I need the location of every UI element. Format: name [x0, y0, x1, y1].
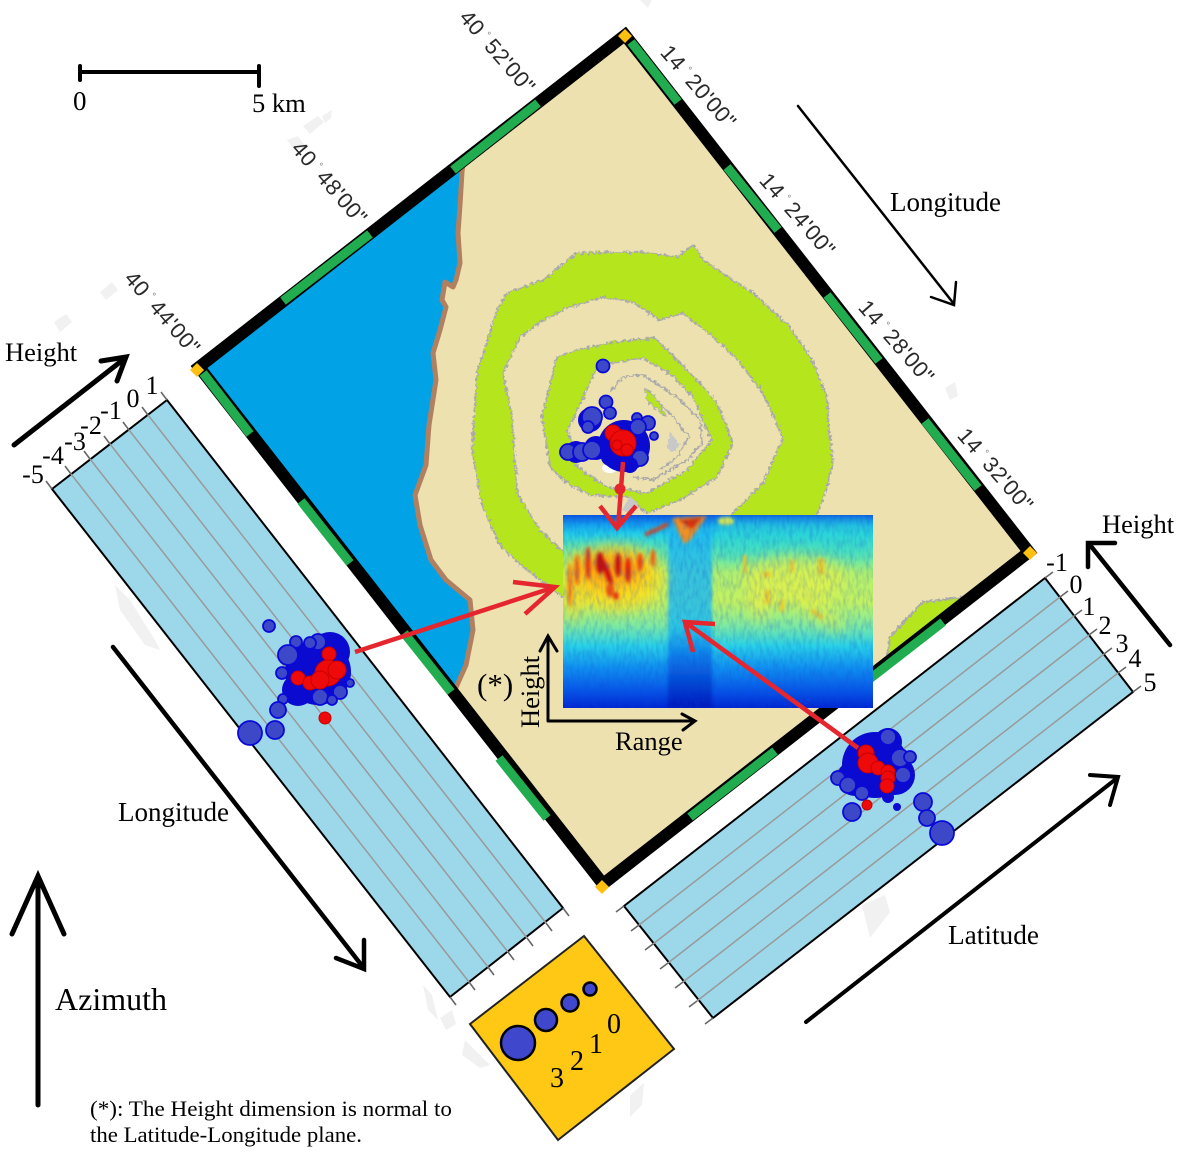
arrow: height direction left [5, 337, 126, 445]
height axis labels: 5 [1144, 668, 1156, 697]
longitude tick labels: 32'00" [978, 452, 1038, 516]
arrow: longitude section to spectrogram [355, 582, 555, 652]
legend circles [501, 982, 596, 1060]
footnote [90, 1096, 452, 1147]
longitude tick labels: 14 [655, 40, 691, 75]
height axis labels: 1 [146, 371, 158, 400]
earthquake cluster in section [831, 728, 954, 845]
arrow: map cluster to spectrogram [600, 462, 636, 528]
inset axes: Range [615, 726, 683, 756]
label: (*) marker: (*) [477, 667, 513, 702]
height axis labels: -5 [22, 460, 44, 489]
longitude tick labels: 14 [853, 295, 889, 330]
scale bar [73, 66, 306, 118]
arrow: longitude direction left: Longitude [118, 797, 229, 827]
longitude tick labels: 14 [952, 423, 988, 458]
arrow: latitude section to spectrogram [685, 622, 858, 748]
left red hot stripes [568, 546, 656, 607]
earthquake cluster in section [238, 620, 354, 745]
arrow: height direction left: Height [5, 337, 78, 367]
panel: longitude-height section [22, 371, 569, 1005]
volcano elevation contours [472, 245, 965, 662]
latitude tick labels: 44'00" [145, 295, 205, 359]
legend labels: 3 [550, 1063, 564, 1094]
arrow: azimuth direction [12, 876, 167, 1105]
outer green ring [472, 245, 833, 620]
longitude tick labels: 24'00" [780, 197, 840, 261]
depth grid lines [71, 415, 546, 982]
height axis labels: 3 [1116, 629, 1128, 658]
speckle streak texture [563, 515, 873, 708]
strip background [624, 578, 1133, 1018]
longitude tick labels: ° [781, 193, 792, 203]
height axis labels: -4 [42, 441, 64, 470]
strip background [52, 400, 563, 997]
panel: latitude-height section [616, 548, 1156, 1024]
scale bar: 0 [73, 86, 86, 116]
arrow: latitude direction: Latitude [948, 920, 1039, 950]
latitude tick labels: ° [313, 161, 324, 171]
arrow: height direction right: Height [1102, 509, 1175, 539]
latitude tick labels [119, 5, 540, 359]
legend labels: 0 [607, 1009, 621, 1040]
latitude tick labels: ° [146, 291, 157, 301]
latitude tick labels: 48'00" [312, 165, 372, 229]
height axis labels: -1 [1046, 548, 1068, 577]
height axis labels: 4 [1128, 644, 1142, 673]
height axis labels: -3 [64, 427, 86, 456]
height axis labels: 0 [126, 384, 140, 413]
green frame segments [203, 42, 978, 818]
arrow: height direction right [1088, 509, 1175, 645]
height axis labels: 2 [1098, 611, 1112, 640]
white crater patch [602, 463, 618, 473]
longitude tick labels: ° [682, 65, 693, 75]
summit green sliver [645, 388, 667, 418]
height axis labels: -2 [80, 411, 102, 440]
latitude tick labels: 40 [454, 5, 490, 40]
low intensity column [668, 528, 712, 708]
upper surface reflection [645, 516, 734, 544]
latitude tick labels: 40 [286, 136, 322, 171]
arrow: longitude direction right [798, 106, 1001, 305]
axis ticks [616, 572, 1141, 1024]
depth grid lines [639, 597, 1118, 1001]
latitude tick labels: 52'00" [480, 34, 540, 98]
height axis labels: 1 [1082, 592, 1096, 621]
legend background [470, 936, 674, 1140]
panel: magnitude legend [470, 936, 674, 1140]
right yellow scatter [743, 554, 850, 637]
longitude tick labels: ° [880, 320, 891, 330]
scale bar: 5 km [252, 88, 306, 118]
height axis labels [22, 371, 158, 489]
central contour lines [610, 375, 702, 480]
longitude tick labels: ° [979, 448, 990, 458]
arrow: azimuth direction: Azimuth [55, 981, 167, 1017]
inset axes: Height [515, 655, 545, 728]
legend labels [550, 1009, 621, 1094]
spectrogram base [563, 515, 873, 708]
panel: main map [119, 5, 1038, 894]
legend labels: 2 [570, 1046, 584, 1077]
longitude tick labels [655, 40, 1038, 516]
land background [199, 35, 1029, 884]
faint background marks [54, 0, 958, 1117]
left yellow hot region [566, 546, 663, 621]
footnote: (*): The Height dimension is normal to [90, 1096, 452, 1121]
inset axes [515, 636, 695, 756]
south-east green patch [887, 597, 965, 662]
earthquake cluster on map [560, 360, 658, 473]
inner green ring [542, 338, 733, 513]
height axis labels [1046, 548, 1156, 697]
latitude tick labels: 40 [119, 266, 155, 301]
longitude tick labels: 20'00" [681, 69, 741, 133]
black frame [199, 35, 1029, 884]
arrow: longitude direction right: Longitude [890, 187, 1001, 217]
arrow: longitude direction left [113, 647, 364, 969]
axis ticks [46, 392, 569, 1005]
cool right half tint [715, 520, 875, 560]
latitude tick labels: ° [481, 30, 492, 40]
chart: tomographic spectrogram [563, 515, 875, 708]
sea and coastline [199, 163, 473, 694]
longitude tick labels: 28'00" [879, 324, 939, 388]
grey vent patch [622, 496, 638, 515]
longitude tick labels: 14 [754, 168, 790, 203]
legend labels: 1 [589, 1029, 603, 1060]
arrow: latitude direction [806, 775, 1118, 1022]
height axis labels: 0 [1070, 570, 1082, 599]
summit grey patch [667, 432, 680, 452]
right hot specks [743, 555, 824, 620]
frame corner markers [190, 29, 1037, 894]
footnote: the Latitude-Longitude plane. [90, 1122, 362, 1147]
height axis labels: -1 [100, 396, 122, 425]
